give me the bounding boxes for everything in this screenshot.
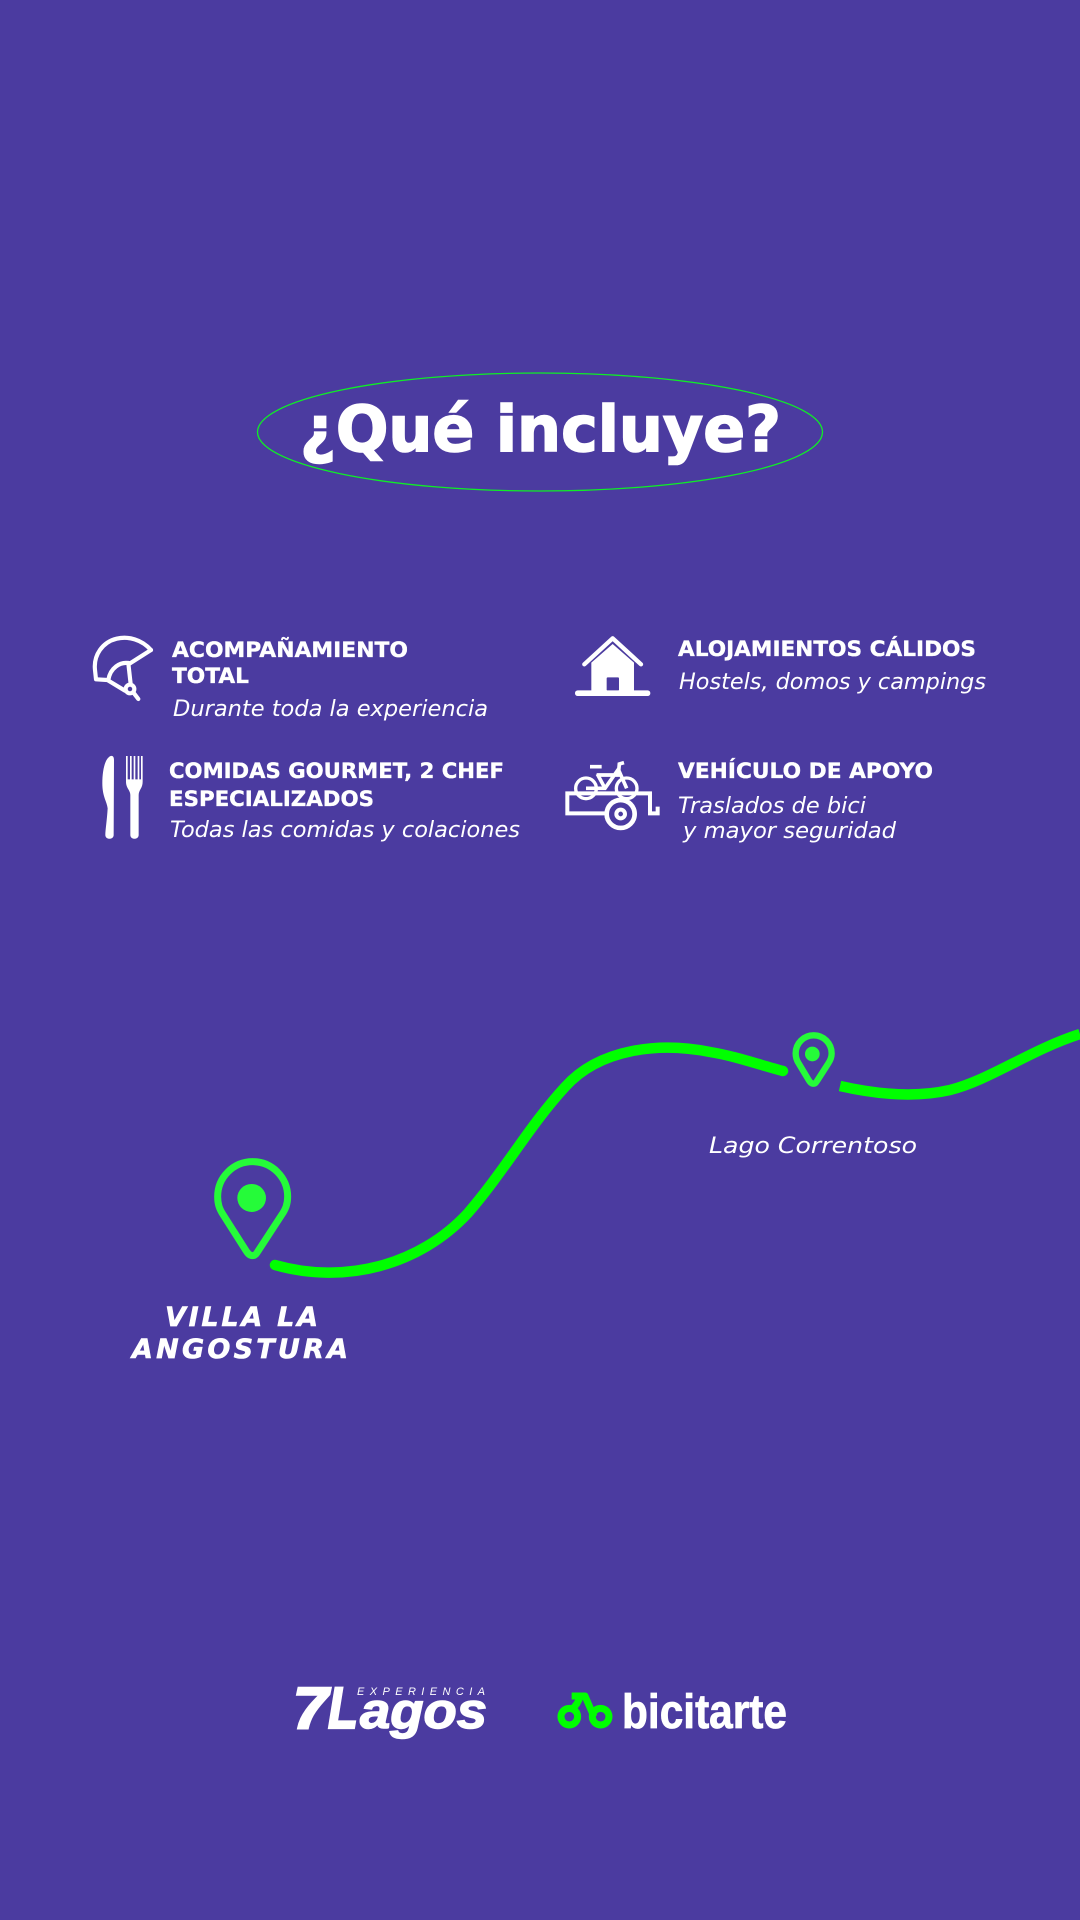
pin: Villa La Angostura: [218, 1162, 288, 1256]
icon: house: [575, 638, 650, 696]
label: Lago Correntoso: Lago Correntoso: [709, 1134, 917, 1159]
title with green ellipse: ¿Qué incluye?: [300, 393, 781, 466]
heading: VEHÍCULO DE APOYO: [678, 758, 933, 783]
heading: [172, 637, 408, 688]
panel: alojamientos: [575, 636, 986, 696]
heading: TOTAL: [172, 664, 249, 688]
route line: second segment: [840, 1034, 1080, 1094]
logo: Bicitarte: [561, 1686, 787, 1739]
icon: bike: [561, 1696, 609, 1725]
description: Durante toda la experiencia: [173, 697, 488, 722]
heading: [169, 759, 504, 811]
description: [678, 794, 897, 844]
panel: vehículo de apoyo: [567, 758, 933, 844]
heading: ESPECIALIZADOS: [169, 787, 374, 811]
pin: Lago Correntoso: [796, 1035, 832, 1084]
panel: acompañamiento total: [95, 637, 488, 722]
label: Villa La Angostura: ANGOSTURA: [130, 1334, 348, 1365]
logo: 7 Lagos: L: [328, 1676, 358, 1741]
icon: bike on trailer: [567, 763, 658, 828]
icon: helmet: [95, 638, 151, 699]
title with green ellipse: [258, 373, 822, 491]
panel: comidas gourmet: [102, 756, 520, 843]
description: Todas las comidas y colaciones: [170, 818, 520, 843]
label: Villa La Angostura: [130, 1302, 348, 1365]
description: y mayor seguridad: [682, 819, 897, 844]
route line: first segment: [275, 1048, 783, 1273]
heading: ACOMPAÑAMIENTO: [172, 637, 408, 662]
icon: knife and fork: [102, 756, 143, 839]
description: Hostels, domos y campings: [679, 670, 986, 695]
logo: 7 Lagos: EXPERIENCIA: [357, 1686, 485, 1698]
heading: COMIDAS GOURMET, 2 CHEF: [169, 759, 504, 783]
logo: 7 Lagos: 7: [293, 1676, 331, 1741]
description: Traslados de bici: [678, 794, 866, 819]
logo: 7 Lagos: agos: [360, 1683, 487, 1739]
heading: ALOJAMIENTOS CÁLIDOS: [678, 636, 976, 661]
logo: 7 Lagos: [293, 1676, 487, 1741]
label: Villa La Angostura: VILLA LA: [165, 1302, 318, 1333]
logo: Bicitarte: bicitarte: [622, 1686, 787, 1739]
